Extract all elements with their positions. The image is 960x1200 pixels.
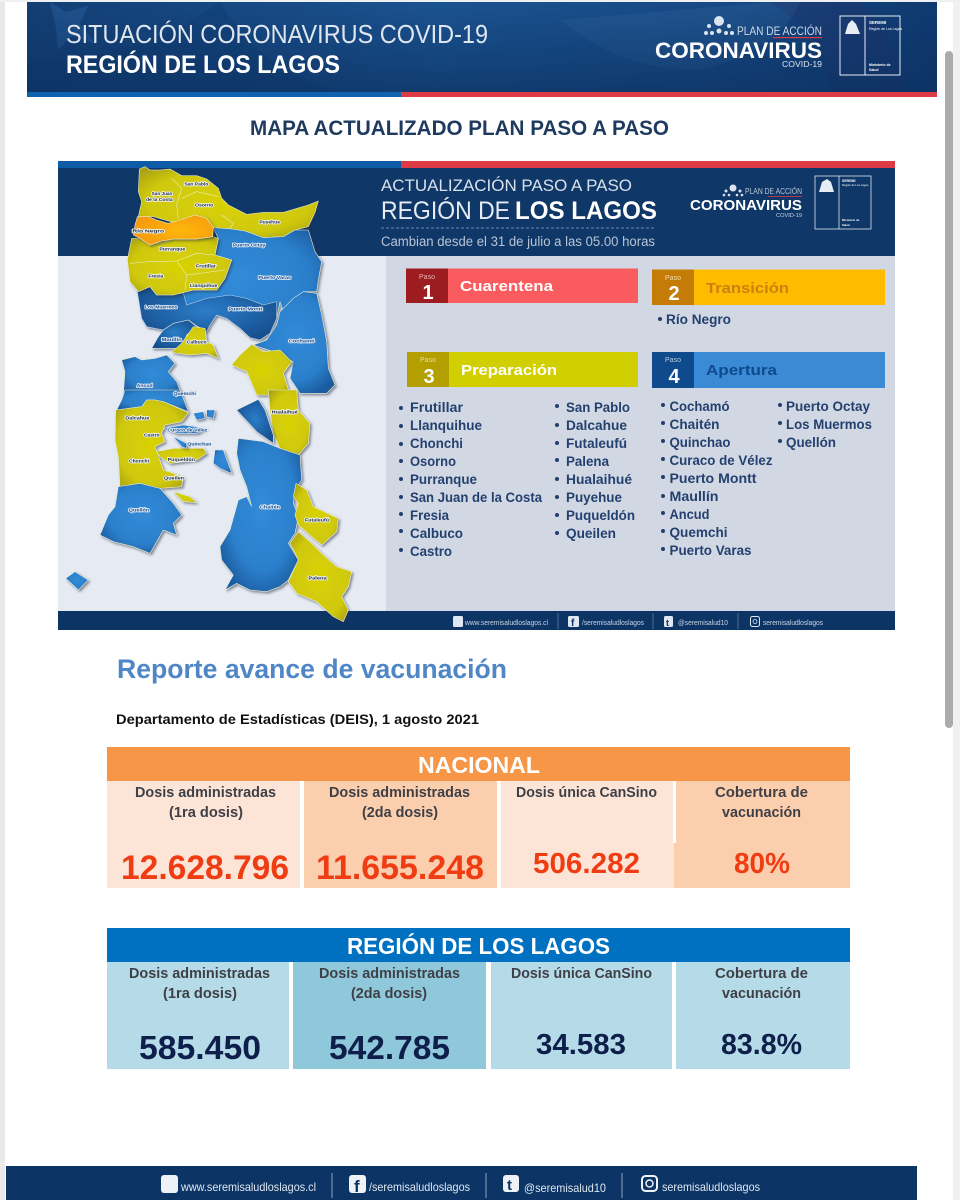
stat: nacional dosis unica: Dosis única CanSino — [516, 785, 657, 801]
logo: plan de accion coronavirus: COVID-19 — [782, 60, 823, 69]
commune labels: Chaitén — [260, 504, 280, 509]
banner title: REGIÓN DE LOS LAGOS — [66, 49, 340, 79]
stat: nacional dosis unica — [501, 781, 674, 888]
stat: nacional primera dosis — [107, 781, 300, 888]
commune labels: Futaleufú — [305, 517, 329, 522]
logo: seremi box small: Ministerio de — [842, 218, 860, 222]
stat: region primera dosis: 585.450 — [139, 1029, 261, 1066]
commune labels: Quemchi — [173, 391, 196, 396]
list: transicion communes: Río Negro — [666, 312, 731, 327]
icon: website — [161, 1175, 178, 1193]
commune labels: Frutillar — [196, 264, 216, 269]
region: Guaitecas island — [66, 572, 88, 590]
commune labels: Dalcahue — [125, 415, 150, 420]
top banner — [27, 2, 937, 97]
banner title — [66, 19, 488, 79]
region header — [107, 928, 850, 962]
commune labels: Los Muermos — [145, 305, 178, 310]
commune labels: Castro — [144, 432, 160, 437]
map panel social footer: t — [666, 618, 669, 628]
map of communes — [66, 167, 352, 622]
stat: nacional cobertura: vacunación — [722, 805, 801, 821]
map panel title: LOS LAGOS — [515, 197, 657, 225]
logo: seremi box: SEREMI — [869, 20, 886, 25]
stat: nacional segunda dosis: (2da dosis) — [362, 805, 438, 821]
commune labels: Puerto Montt — [228, 306, 263, 311]
stat: nacional segunda dosis — [304, 781, 497, 888]
region: Puerto Montt, Los Muermos shade — [137, 287, 277, 340]
list: preparacion communes: San Pablo — [566, 400, 630, 415]
stat: region segunda dosis: 542.785 — [329, 1029, 450, 1066]
region: Purranque, Frutillar, Fresia, Llanquihue — [127, 237, 232, 295]
page social footer: /seremisaludloslagos — [369, 1180, 470, 1194]
logo: plan de accion coronavirus small: COVID-19 — [776, 213, 802, 219]
page social footer: seremisaludloslagos — [662, 1180, 760, 1194]
map panel social footer: /seremisaludloslagos — [582, 620, 644, 627]
commune labels — [132, 182, 315, 388]
list: apertura communes: Cochamó — [670, 399, 730, 414]
step 1: cuarentena: 1 — [422, 282, 434, 304]
list: preparacion communes: Purranque — [410, 472, 477, 487]
list: apertura communes: Puerto Varas — [670, 543, 752, 558]
commune labels: Llanquihue — [190, 283, 218, 288]
page social footer: www.seremisaludloslagos.cl — [180, 1180, 316, 1194]
logo: seremi box: Salud — [869, 68, 879, 72]
logo: plan de accion coronavirus small: PLAN DE ACCIÓN — [745, 187, 802, 196]
nacional header — [107, 747, 850, 781]
banner title: SITUACIÓN CORONAVIRUS COVID-19 — [66, 19, 488, 49]
commune labels: de la Costa — [146, 197, 173, 202]
map panel title: Cambian desde el 31 de julio a las 05.00 horas — [381, 234, 655, 249]
commune labels: Ancud — [137, 383, 153, 388]
step 4: apertura: Apertura — [706, 362, 778, 379]
region: Futaleufu — [293, 483, 338, 545]
stat: nacional primera dosis: Dosis administradas — [135, 785, 276, 801]
map panel social footer: f — [571, 618, 575, 629]
list: preparacion communes: Fresia — [410, 508, 449, 523]
list: preparacion communes: Castro — [410, 544, 452, 559]
logo: seremi box: Ministerio de — [869, 63, 891, 67]
commune labels: Curaco de Vélez — [167, 427, 208, 432]
logo: seremi box small — [815, 176, 871, 229]
logo: seremi box small: Región de Los Lagos — [842, 183, 869, 187]
region: Ancud south, Quemchi — [117, 390, 188, 412]
step 1: cuarentena: Cuarentena — [460, 278, 554, 295]
stat: nacional cobertura: Cobertura de — [715, 785, 808, 801]
stat: nacional primera dosis: (1ra dosis) — [169, 805, 243, 821]
list: apertura communes: Curaco de Vélez — [670, 453, 773, 468]
source line: Departamento de Estadísticas (DEIS), 1 agosto 2021 — [116, 711, 479, 727]
stat: region dosis unica — [491, 962, 672, 1069]
commune labels: Puyehue — [259, 219, 280, 224]
list: preparacion communes: Hualaihué — [566, 472, 633, 487]
icon: tumblr: t — [507, 1177, 512, 1194]
step 3: preparacion — [407, 352, 638, 388]
stat: region primera dosis: Dosis administradas — [129, 966, 270, 982]
nacional header: NACIONAL — [418, 752, 540, 778]
step 4: apertura: 4 — [668, 366, 680, 388]
commune labels — [125, 391, 329, 580]
icon: facebook — [349, 1175, 366, 1196]
region: Hualaihue south — [268, 390, 310, 455]
region: Chaiten north — [237, 399, 273, 443]
commune labels: Río Negro — [132, 229, 164, 234]
commune labels: Osorno — [195, 203, 213, 208]
stat: region segunda dosis: (2da dosis) — [351, 986, 427, 1002]
step 2: transicion: Paso — [665, 275, 681, 282]
stat: region segunda dosis: Dosis administradas — [319, 966, 460, 982]
step 1: cuarentena: Paso — [419, 274, 435, 281]
logo: seremi box small: Salud — [842, 223, 850, 227]
list: preparacion communes: Puyehue — [566, 490, 622, 505]
list: preparacion communes: Futaleufú — [566, 436, 627, 451]
list: apertura communes: Ancud — [670, 507, 710, 522]
stat: nacional segunda dosis: Dosis administradas — [329, 785, 470, 801]
stat: nacional dosis unica: 506.282 — [533, 848, 640, 880]
scrollbar — [945, 51, 953, 728]
list: preparacion communes: Puqueldón — [566, 508, 635, 523]
stat: region segunda dosis — [293, 962, 486, 1069]
commune labels: Calbuco — [187, 340, 207, 345]
region: Puerto Octay, Puerto Varas — [137, 228, 322, 340]
stat: region cobertura: Cobertura de — [715, 966, 808, 982]
step 3: preparacion: Paso — [420, 357, 436, 364]
region: Quellon — [100, 483, 182, 553]
region: Cochamo — [253, 292, 335, 393]
islands: Puqueldon, Queilen — [157, 448, 207, 503]
map panel social footer: seremisaludloslagos — [763, 620, 823, 627]
stat: region dosis unica: 34.583 — [536, 1029, 626, 1061]
page social footer: @seremisalud10 — [524, 1181, 606, 1195]
stat: region dosis unica: Dosis única CanSino — [511, 966, 652, 982]
logo: plan de accion coronavirus: CORONAVIRUS — [655, 38, 822, 63]
region: Palena — [288, 532, 352, 622]
region: Rio Negro — [133, 215, 213, 245]
region: Chaiten — [220, 438, 302, 592]
region: Hualaihue north — [232, 344, 292, 395]
commune labels: Puerto Varas — [258, 275, 291, 280]
list: apertura communes — [661, 399, 872, 558]
icon: instagram — [642, 1176, 657, 1191]
list: preparacion communes: Calbuco — [410, 526, 463, 541]
region: Ancud north — [122, 355, 182, 395]
region: northern communes — [138, 167, 318, 238]
region: Dalcahue, Castro, Chonchi, Queilen — [115, 400, 188, 488]
stat: region primera dosis: (1ra dosis) — [163, 986, 237, 1002]
commune labels: Hualaihué — [272, 409, 298, 414]
stat: nacional cobertura — [673, 781, 850, 888]
commune labels: Palena — [308, 575, 327, 580]
commune labels: Purranque — [159, 247, 186, 252]
list: preparacion communes: Queilen — [566, 526, 616, 541]
islands: Quinchao, Curaco de Velez — [163, 410, 232, 473]
heading: mapa actualizado: MAPA ACTUALIZADO PLAN PASO A PASO — [250, 117, 669, 140]
step 4: apertura — [652, 352, 885, 388]
commune dividers — [130, 178, 233, 290]
commune labels: San Pablo — [184, 182, 208, 187]
map panel title: REGIÓN DE — [381, 196, 510, 225]
commune labels: Queilen — [164, 475, 184, 480]
region: Maullin — [152, 320, 197, 348]
commune labels: Fresia — [148, 274, 164, 279]
list: preparacion communes: Llanquihue — [410, 418, 482, 433]
panel: paso a paso map — [58, 161, 895, 630]
panel: nacional — [107, 747, 850, 888]
stat: nacional cobertura: 80% — [734, 848, 790, 880]
step 3: preparacion: 3 — [423, 366, 435, 388]
map panel social footer: www.seremisaludloslagos.cl — [464, 620, 548, 627]
panel: region de los lagos — [107, 928, 850, 1069]
list: apertura communes: Quinchao — [670, 435, 730, 450]
commune labels: Quellón — [129, 507, 150, 512]
list: apertura communes: Puerto Octay — [786, 399, 870, 414]
page social footer — [6, 1166, 917, 1200]
logo: plan de accion coronavirus: PLAN DE ACCIÓN — [737, 23, 822, 38]
list: preparacion communes: Frutillar — [410, 400, 464, 415]
list: apertura communes: Quemchi — [670, 525, 728, 540]
map panel social footer — [453, 613, 823, 629]
list: preparacion communes: Dalcahue — [566, 418, 627, 433]
list: apertura communes: Chaitén — [670, 417, 720, 432]
commune labels: Quinchao — [187, 441, 211, 446]
step 3: preparacion: Preparación — [461, 362, 557, 379]
logo: plan de accion coronavirus small: CORONAVIRUS — [690, 197, 802, 214]
commune labels: Puqueldón — [168, 457, 195, 462]
commune labels: Puerto Octay — [233, 243, 266, 248]
stat: region cobertura: vacunación — [722, 986, 801, 1002]
icon: tumblr — [503, 1175, 519, 1194]
step 4: apertura: Paso — [665, 357, 681, 364]
logo: plan de accion coronavirus small — [690, 184, 802, 219]
stat: nacional segunda dosis: 11.655.248 — [316, 849, 484, 887]
commune labels: Maullín — [162, 337, 182, 342]
list: apertura communes: Los Muermos — [786, 417, 872, 432]
logo: seremi box: Región de Los Lagos — [869, 27, 902, 31]
step 2: transicion — [652, 270, 885, 305]
heading: reporte avance de vacunacion: Reporte avance de vacunación — [117, 654, 507, 684]
list: apertura communes: Quellón — [786, 435, 836, 450]
stat: region primera dosis — [107, 962, 289, 1069]
list: preparacion communes: Osorno — [410, 454, 456, 469]
step 2: transicion: 2 — [668, 283, 680, 305]
list: apertura communes: Maullín — [670, 489, 718, 504]
map panel social footer: @seremisalud10 — [678, 620, 728, 627]
logo: seremi box small: SEREMI — [842, 179, 855, 183]
stat: nacional primera dosis: 12.628.796 — [121, 849, 289, 887]
logo: seremi box — [840, 16, 902, 75]
list: preparacion communes: Palena — [566, 454, 609, 469]
region header: REGIÓN DE LOS LAGOS — [347, 932, 610, 959]
map panel title — [381, 176, 657, 249]
region: Calbuco — [172, 327, 218, 358]
map panel title: ACTUALIZACIÓN PASO A PASO — [381, 176, 632, 195]
stat: region cobertura: 83.8% — [721, 1029, 802, 1061]
commune labels: Cochamó — [289, 338, 315, 343]
list: preparacion communes: San Juan de la Costa — [410, 490, 542, 505]
logo: plan de accion coronavirus — [655, 16, 823, 69]
icon: facebook: f — [354, 1177, 360, 1196]
commune labels: San Juan — [152, 191, 173, 196]
commune labels: Chonchi — [129, 458, 149, 463]
step 2: transicion: Transición — [706, 280, 789, 297]
stat: region cobertura — [676, 962, 850, 1069]
list: preparacion communes: Chonchi — [410, 436, 463, 451]
list: preparacion communes — [399, 400, 635, 559]
step 1: cuarentena — [406, 268, 638, 304]
list: apertura communes: Puerto Montt — [670, 471, 757, 486]
